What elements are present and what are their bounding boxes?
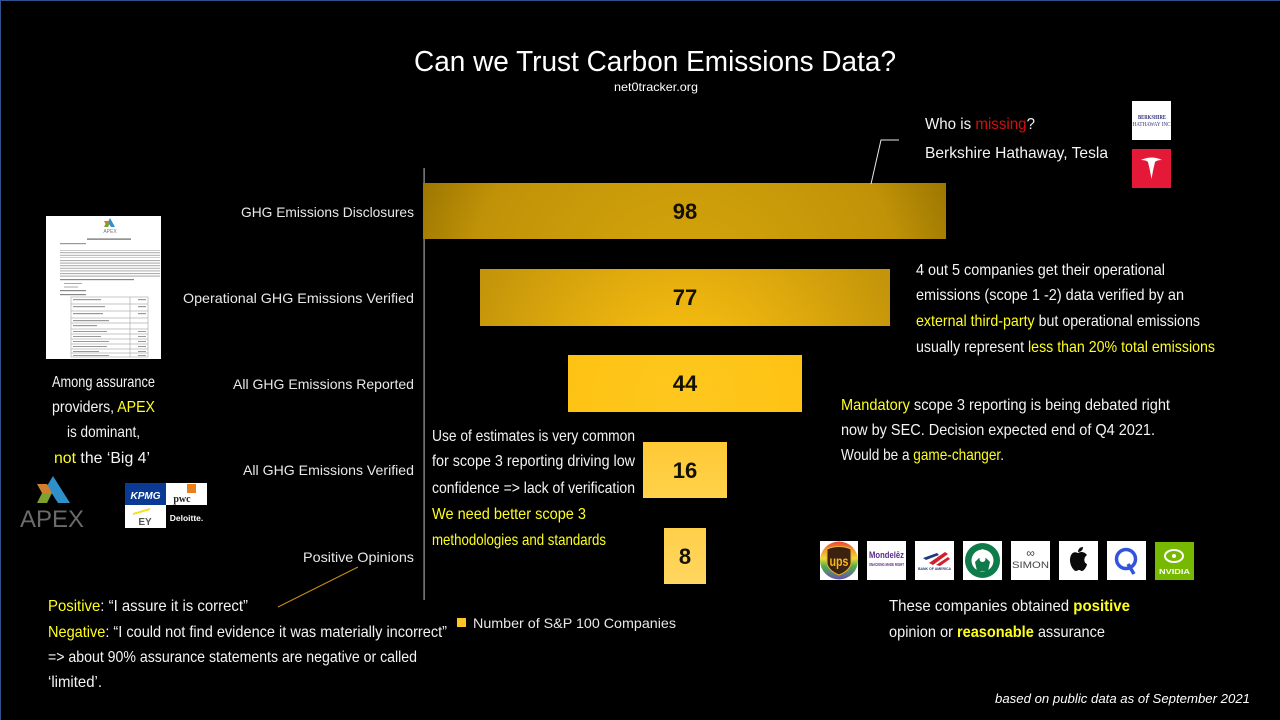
logo row: companies with positive opinion <box>820 541 1194 580</box>
icon: Big 4 logos: Deloitte. <box>170 513 203 523</box>
icon: Mondelez: SNACKING MADE RIGHT <box>869 562 904 567</box>
text: scope 3 estimates note: We need better scope 3 <box>432 506 586 523</box>
text: operational emissions note <box>916 262 1215 356</box>
icon: Simon <box>1011 541 1050 580</box>
icon: Big 4 logos: EY <box>138 517 152 528</box>
icon: Berkshire Hathaway logo: BERKSHIRE <box>1138 115 1166 121</box>
text: scope 3 estimates note <box>432 428 635 549</box>
icon: Bank of America: BANK OF AMERICA <box>918 567 951 571</box>
bar: Positive Opinions: Positive Opinions <box>303 549 414 565</box>
bar: GHG Emissions Disclosures: 98 <box>673 199 697 224</box>
icon: Berkshire Hathaway logo <box>1132 101 1171 140</box>
icon: Big 4 logos: pwc <box>173 494 191 505</box>
text: operational emissions note: external third-party but operational emissions <box>916 313 1200 330</box>
text: positive vs negative definitions: ‘limited’. <box>48 674 102 691</box>
text: positive vs negative definitions: Positive: “I assure it is correct” <box>48 598 248 615</box>
icon: APEX logo: APEX <box>20 506 84 533</box>
icon: UPS <box>820 541 858 580</box>
icon: Tesla logo <box>1132 149 1171 188</box>
text: mandatory scope 3 note: now by SEC. Decision expected end of Q4 2021. <box>841 422 1155 439</box>
bar: Operational GHG Emissions Verified: Operational GHG Emissions Verified <box>183 290 414 306</box>
text: mandatory scope 3 note <box>841 397 1170 464</box>
bar: GHG Emissions Disclosures <box>241 183 946 239</box>
bar: GHG Emissions Disclosures: GHG Emissions Disclosures <box>241 204 414 220</box>
text: assurance providers note: is dominant, <box>67 424 140 441</box>
bar: All GHG Emissions Verified: 16 <box>673 458 697 483</box>
text: assurance providers note: not the ‘Big 4’ <box>54 450 150 467</box>
icon: Berkshire Hathaway logo: HATHAWAY INC <box>1132 122 1170 128</box>
text: mandatory scope 3 note: Would be a game-changer. <box>841 447 1004 464</box>
title: Can we Trust Carbon Emissions Data? <box>414 46 896 78</box>
icon: NVIDIA <box>1155 542 1194 580</box>
footnote: based on public data as of September 2021 <box>995 691 1250 706</box>
arrow: positive opinions leader <box>278 567 358 607</box>
icon: Simon: SIMON <box>1012 560 1049 570</box>
icon: Simon: ∞ <box>1026 546 1035 560</box>
text: assurance providers note: providers, APEX <box>52 399 155 416</box>
icon: Starbucks <box>963 541 1002 580</box>
text: positive opinion companies note <box>889 598 1130 641</box>
icon: Mondelez: Mondelēz <box>869 550 904 560</box>
text: positive opinion companies note: opinion or reasonable assurance <box>889 624 1105 641</box>
text: operational emissions note: emissions (scope 1 -2) data verified by an <box>916 287 1184 304</box>
text: assurance providers note: Among assurance <box>52 374 155 391</box>
bar: All GHG Emissions Reported <box>233 355 802 412</box>
bar: All GHG Emissions Reported: All GHG Emissions Reported <box>233 376 414 392</box>
text: scope 3 estimates note: Use of estimates is very common <box>432 428 635 445</box>
text: operational emissions note: usually represent less than 20% total emissions <box>916 339 1215 356</box>
legend: Number of S&P 100 Companies <box>473 615 676 631</box>
bar: Operational GHG Emissions Verified: 77 <box>673 285 697 310</box>
arrow: callout leader to top bar <box>871 140 899 184</box>
icon: Big 4 logos <box>125 483 207 528</box>
text: scope 3 estimates note: confidence => lack of verification <box>432 480 635 497</box>
text: scope 3 estimates note: methodologies and standards <box>432 532 606 549</box>
thumbnail: APEX assurance statement document: APEX <box>103 229 117 235</box>
thumbnail: APEX assurance statement document <box>46 216 161 359</box>
bar: All GHG Emissions Verified: All GHG Emissions Verified <box>243 462 414 478</box>
bar: Positive Opinions <box>303 528 706 584</box>
text: mandatory scope 3 note: Mandatory scope 3 reporting is being debated right <box>841 397 1170 414</box>
callout: who is missing <box>925 116 1108 162</box>
icon: Mondelez <box>867 541 906 580</box>
icon: Apple <box>1059 541 1098 580</box>
bar: Operational GHG Emissions Verified <box>183 269 890 326</box>
icon: Bank of America <box>915 541 954 580</box>
text: operational emissions note: 4 out 5 companies get their operational <box>916 262 1165 279</box>
subtitle: net0tracker.org <box>614 80 698 94</box>
bar chart <box>183 168 946 600</box>
bar: All GHG Emissions Verified <box>243 442 727 498</box>
text: positive vs negative definitions: Negative: “I could not find evidence it was materially incorrect” <box>48 624 447 641</box>
text: positive opinion companies note: These companies obtained positive <box>889 598 1130 615</box>
callout: who is missing: Who is missing? <box>925 116 1035 133</box>
text: positive vs negative definitions: => about 90% assurance statements are negative or called <box>48 649 417 666</box>
text: assurance providers note <box>52 374 155 467</box>
icon: Qualcomm Q <box>1107 541 1146 580</box>
bar: All GHG Emissions Reported: 44 <box>673 371 698 396</box>
bar: Positive Opinions: 8 <box>679 544 691 569</box>
icon: NVIDIA: NVIDIA <box>1159 567 1191 576</box>
text: positive vs negative definitions <box>48 598 447 691</box>
text: scope 3 estimates note: for scope 3 reporting driving low <box>432 453 635 470</box>
icon: APEX logo <box>20 476 84 533</box>
icon: UPS: ups <box>830 553 849 569</box>
icon: Big 4 logos: KPMG <box>130 491 161 502</box>
callout: who is missing: Berkshire Hathaway, Tesla <box>925 145 1108 162</box>
